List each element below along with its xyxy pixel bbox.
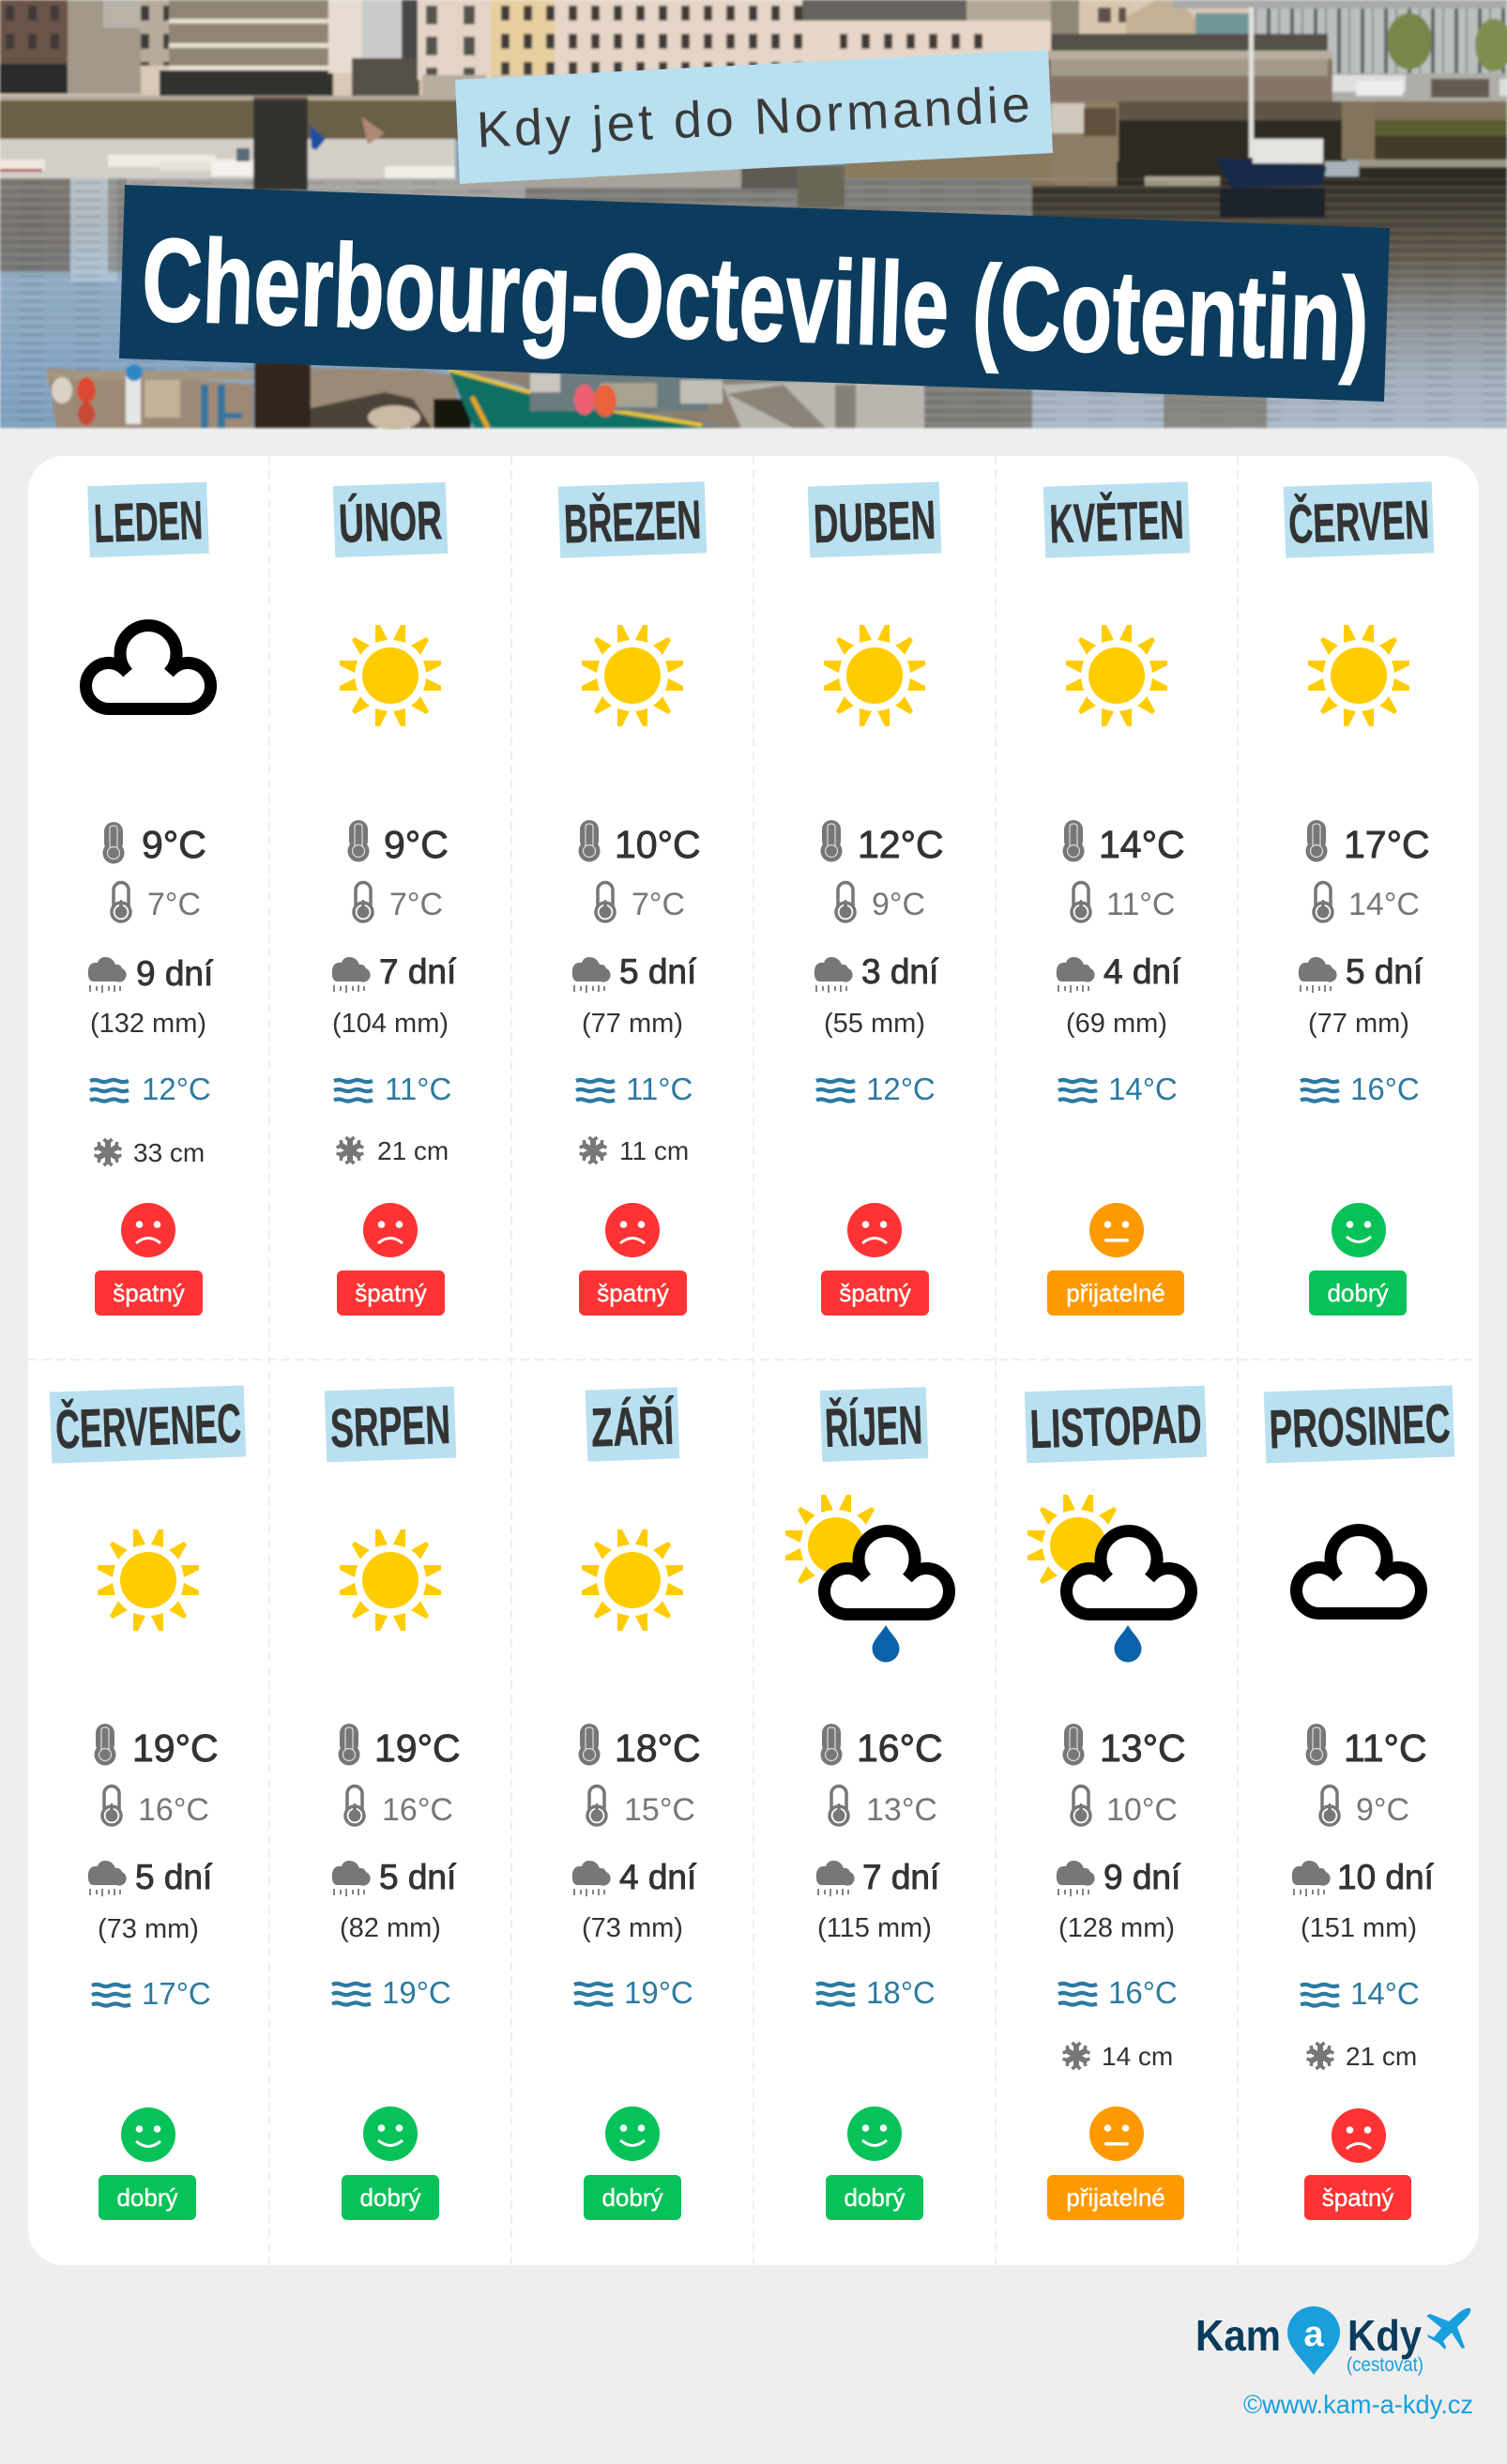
rating badge: špatný bbox=[355, 1279, 427, 1307]
heading: září bbox=[586, 1387, 679, 1462]
rating badge bbox=[337, 1270, 445, 1316]
rain days: 5 dní bbox=[135, 1858, 213, 1896]
max temperature bbox=[94, 1724, 219, 1770]
snow: 21 cm bbox=[377, 1136, 449, 1165]
heading: srpen bbox=[325, 1387, 456, 1462]
min temperature bbox=[1314, 882, 1420, 922]
sea temperature: 16°C bbox=[1108, 1975, 1178, 2010]
month: březen bbox=[558, 481, 707, 1316]
rain days bbox=[332, 1858, 457, 1896]
month: srpen bbox=[325, 1387, 461, 2220]
sea temperature: 17°C bbox=[142, 1976, 211, 2011]
max temperature bbox=[103, 822, 206, 866]
sea temperature: 16°C bbox=[1350, 1072, 1420, 1106]
min temperature: 9°C bbox=[1356, 1792, 1409, 1828]
icon: sun bbox=[582, 1529, 683, 1631]
heading: červen bbox=[1284, 481, 1434, 558]
sea temperature bbox=[334, 1072, 451, 1106]
rating face bbox=[605, 1203, 660, 1257]
icon: sun bbox=[1066, 625, 1167, 726]
month: únor bbox=[332, 482, 457, 1316]
rating badge bbox=[342, 2175, 439, 2220]
icon: sun bbox=[98, 1529, 199, 1631]
rain days: 4 dní bbox=[1104, 952, 1181, 991]
snow bbox=[1307, 2042, 1417, 2071]
rating badge bbox=[826, 2175, 923, 2220]
website url: ©www.kam-a-kdy.cz bbox=[1243, 2390, 1473, 2419]
min temperature bbox=[587, 1787, 695, 1828]
rating face bbox=[605, 2107, 660, 2161]
rainfall: (151 mm) bbox=[1301, 1913, 1417, 1943]
heading: červenec bbox=[50, 1385, 246, 1464]
heading: listopad: LISTOPAD bbox=[1029, 1393, 1203, 1460]
heading: listopad bbox=[1025, 1386, 1207, 1463]
sea temperature bbox=[90, 1072, 211, 1106]
rating badge: dobrý bbox=[116, 2183, 178, 2212]
max temperature: 9°C bbox=[384, 823, 449, 866]
min temperature: 16°C bbox=[138, 1792, 209, 1828]
quay walls bbox=[0, 96, 460, 100]
rainfall: (115 mm) bbox=[817, 1913, 932, 1943]
panel: monthly climate table bbox=[28, 456, 1479, 2265]
min temperature: 7°C bbox=[632, 887, 685, 922]
rain days: 3 dní bbox=[861, 952, 939, 991]
max temperature bbox=[347, 820, 449, 866]
logo tagline: (cestovat) bbox=[1347, 2354, 1423, 2376]
rain days bbox=[1292, 1858, 1435, 1896]
rating badge: špatný bbox=[113, 1279, 185, 1307]
rating face bbox=[121, 2107, 175, 2162]
rating badge bbox=[1047, 1270, 1184, 1316]
sea temperature bbox=[816, 1072, 936, 1106]
sea temperature: 11°C bbox=[626, 1072, 693, 1106]
icon: sun bbox=[1308, 625, 1409, 726]
heading: říjen bbox=[820, 1387, 928, 1462]
min temperature bbox=[1072, 1787, 1178, 1828]
icon: sun, cloud and rain drop bbox=[785, 1495, 950, 1663]
rain days bbox=[814, 952, 939, 993]
min temperature bbox=[596, 882, 685, 922]
rainfall: (77 mm) bbox=[1308, 1009, 1409, 1039]
rating badge bbox=[95, 1270, 203, 1316]
rain days bbox=[88, 954, 214, 993]
max temperature bbox=[1062, 820, 1185, 866]
max temperature: 16°C bbox=[857, 1726, 943, 1770]
sea temperature bbox=[1301, 1072, 1420, 1106]
rain days bbox=[88, 1858, 213, 1896]
min temperature: 10°C bbox=[1106, 1792, 1178, 1828]
max temperature: 19°C bbox=[374, 1726, 461, 1770]
rain days bbox=[572, 1858, 697, 1896]
sea temperature: 12°C bbox=[142, 1072, 211, 1106]
sea temperature: 19°C bbox=[624, 1975, 693, 2010]
moored white boats bbox=[0, 139, 455, 178]
rain days: 9 dní bbox=[136, 954, 214, 993]
min temperature: 14°C bbox=[1348, 887, 1420, 922]
min temperature: 16°C bbox=[382, 1792, 453, 1828]
sea temperature bbox=[1301, 1976, 1420, 2011]
max temperature bbox=[820, 820, 944, 866]
icon: airplane bbox=[1426, 2308, 1470, 2350]
min temperature: 7°C bbox=[389, 887, 443, 922]
icon: cloud bbox=[86, 626, 210, 709]
heading: duben: DUBEN bbox=[813, 490, 936, 555]
icon: sun bbox=[824, 625, 925, 726]
rain days bbox=[816, 1858, 940, 1896]
rating badge: špatný bbox=[1322, 2183, 1393, 2212]
rating badge: dobrý bbox=[359, 2183, 421, 2212]
rain days: 5 dní bbox=[1346, 952, 1423, 991]
month: listopad bbox=[1025, 1386, 1207, 2220]
subtitle banner: Kdy jet do Normandie bbox=[476, 76, 1031, 159]
rain days: 5 dní bbox=[619, 952, 697, 991]
fishing boat bbox=[1216, 158, 1327, 188]
sea temperature bbox=[574, 1975, 693, 2010]
min temperature: 7°C bbox=[147, 887, 201, 922]
snow: 33 cm bbox=[133, 1138, 205, 1167]
rating badge bbox=[579, 1270, 687, 1316]
rainfall: (132 mm) bbox=[90, 1009, 206, 1039]
rating face bbox=[121, 1203, 175, 1257]
icon: sun, cloud and rain drop bbox=[1028, 1495, 1192, 1663]
max temperature: 17°C bbox=[1344, 823, 1430, 866]
rain days bbox=[1299, 952, 1423, 993]
rain days: 10 dní bbox=[1337, 1858, 1435, 1896]
icon: cloud bbox=[1297, 1530, 1421, 1614]
snow bbox=[1063, 2042, 1173, 2071]
rain days bbox=[1057, 952, 1181, 993]
min temperature bbox=[112, 882, 201, 922]
subtitle banner bbox=[455, 50, 1053, 184]
max temperature bbox=[578, 1724, 701, 1770]
max temperature: 11°C bbox=[1344, 1726, 1427, 1770]
month: červen bbox=[1284, 481, 1434, 1316]
rainfall: (128 mm) bbox=[1058, 1913, 1175, 1943]
sea temperature: 18°C bbox=[866, 1975, 936, 2010]
sea temperature: 12°C bbox=[866, 1072, 936, 1106]
min temperature: 15°C bbox=[624, 1792, 695, 1828]
rating badge: dobrý bbox=[844, 2183, 906, 2212]
sea temperature: 14°C bbox=[1350, 1976, 1420, 2011]
max temperature bbox=[820, 1724, 943, 1770]
rating face bbox=[1089, 2107, 1144, 2161]
green hull bbox=[449, 370, 706, 428]
max temperature bbox=[1062, 1724, 1186, 1770]
mooring post bbox=[253, 97, 308, 190]
heading: září: ZÁŘÍ bbox=[590, 1394, 676, 1459]
rating badge: přijatelné bbox=[1066, 2183, 1165, 2212]
month: prosinec bbox=[1264, 1386, 1454, 2220]
heading: únor: ÚNOR bbox=[338, 490, 443, 555]
rainfall: (73 mm) bbox=[582, 1913, 683, 1943]
month: leden bbox=[86, 482, 214, 1316]
month: říjen bbox=[785, 1387, 950, 2220]
rating face bbox=[1332, 1203, 1386, 1257]
rating face bbox=[847, 2107, 902, 2161]
max temperature: 18°C bbox=[615, 1726, 701, 1770]
pavilion bbox=[1051, 34, 1328, 51]
heading: červenec: ČERVENEC bbox=[54, 1393, 242, 1460]
month: duben bbox=[808, 482, 944, 1316]
rating face bbox=[1089, 1203, 1144, 1257]
max temperature: 10°C bbox=[615, 823, 701, 866]
heading: leden: LEDEN bbox=[93, 490, 204, 555]
sea temperature bbox=[1058, 1975, 1178, 2010]
min temperature bbox=[1320, 1787, 1409, 1828]
heading: květen bbox=[1043, 481, 1190, 558]
min temperature: 11°C bbox=[1106, 887, 1175, 922]
rain days: 4 dní bbox=[619, 1858, 697, 1896]
snow bbox=[337, 1136, 449, 1165]
rainfall: (55 mm) bbox=[824, 1009, 925, 1039]
max temperature: 19°C bbox=[132, 1726, 219, 1770]
rainfall: (73 mm) bbox=[98, 1914, 199, 1944]
icon: sun bbox=[340, 1529, 441, 1631]
rain days bbox=[1057, 1858, 1181, 1896]
snow bbox=[580, 1136, 689, 1165]
min temperature bbox=[1072, 882, 1175, 922]
sea temperature: 14°C bbox=[1108, 1072, 1178, 1106]
rain days: 7 dní bbox=[379, 952, 457, 991]
month: květen bbox=[1043, 481, 1190, 1316]
rain days bbox=[332, 952, 457, 993]
min temperature: 9°C bbox=[872, 887, 925, 922]
dock at bottom bbox=[47, 368, 253, 428]
rating badge bbox=[821, 1270, 929, 1316]
rating badge bbox=[99, 2175, 196, 2220]
icon: sun bbox=[340, 625, 441, 726]
max temperature bbox=[1306, 1724, 1427, 1770]
snow bbox=[95, 1138, 205, 1167]
rainfall: (69 mm) bbox=[1066, 1009, 1167, 1039]
heading: říjen: ŘÍJEN bbox=[824, 1394, 923, 1459]
sea temperature bbox=[332, 1975, 451, 2010]
min temperature bbox=[830, 1787, 937, 1828]
rating face bbox=[847, 1203, 902, 1257]
snow: 14 cm bbox=[1102, 2042, 1173, 2071]
max temperature bbox=[338, 1724, 461, 1770]
rainfall: (77 mm) bbox=[582, 1009, 683, 1039]
min temperature: 13°C bbox=[866, 1792, 937, 1828]
sea temperature bbox=[1058, 1072, 1178, 1106]
heading: březen: BŘEZEN bbox=[563, 489, 702, 555]
icon: location pin bbox=[1287, 2306, 1340, 2375]
max temperature: 12°C bbox=[858, 823, 944, 866]
photo: Cherbourg harbour background bbox=[0, 0, 1507, 430]
sea temperature: 19°C bbox=[382, 1975, 451, 2010]
rain days bbox=[572, 952, 697, 993]
snow: 11 cm bbox=[619, 1136, 689, 1165]
sea temperature bbox=[576, 1072, 693, 1106]
rainfall: (104 mm) bbox=[332, 1009, 449, 1039]
max temperature: 14°C bbox=[1099, 823, 1185, 866]
heading: duben bbox=[808, 482, 941, 557]
snow: 21 cm bbox=[1346, 2042, 1417, 2071]
rating face bbox=[1332, 2108, 1386, 2163]
sea temperature: 11°C bbox=[385, 1072, 451, 1106]
logo: Kam a Kdy bbox=[1195, 2306, 1473, 2419]
min temperature bbox=[354, 882, 443, 922]
logo wordmark left: Kam bbox=[1195, 2311, 1281, 2360]
rain days: 9 dní bbox=[1104, 1858, 1181, 1896]
heading: březen bbox=[558, 481, 707, 558]
month: červenec bbox=[50, 1385, 246, 2220]
logo wordmark right: Kdy bbox=[1347, 2311, 1422, 2360]
max temperature bbox=[578, 820, 701, 866]
rain days: 5 dní bbox=[379, 1858, 457, 1896]
min temperature bbox=[345, 1787, 453, 1828]
heading: srpen: SRPEN bbox=[329, 1394, 451, 1459]
sea temperature bbox=[92, 1976, 211, 2011]
rain days: 7 dní bbox=[862, 1858, 940, 1896]
min temperature bbox=[102, 1787, 209, 1828]
heading: leden bbox=[87, 482, 209, 557]
rating face bbox=[363, 1203, 418, 1257]
rating badge: špatný bbox=[839, 1279, 911, 1307]
sea temperature bbox=[816, 1975, 936, 2010]
min temperature bbox=[836, 882, 925, 922]
max temperature: 9°C bbox=[142, 823, 206, 866]
heading: květen: KVĚTEN bbox=[1048, 490, 1185, 555]
rating badge bbox=[1047, 2175, 1184, 2220]
rating badge bbox=[1304, 2175, 1411, 2220]
rating badge: dobrý bbox=[1327, 1279, 1389, 1307]
max temperature: 13°C bbox=[1100, 1726, 1186, 1770]
heading: únor bbox=[333, 482, 448, 557]
buildings bbox=[0, 0, 1507, 103]
rating face bbox=[363, 2107, 418, 2161]
rating badge bbox=[584, 2175, 681, 2220]
rainfall: (82 mm) bbox=[340, 1913, 441, 1943]
rating badge: špatný bbox=[597, 1279, 669, 1307]
rating badge bbox=[1309, 1270, 1407, 1316]
rating badge: přijatelné bbox=[1066, 1279, 1165, 1307]
icon: location pin: a bbox=[1303, 2315, 1324, 2354]
month: září bbox=[572, 1387, 701, 2220]
icon: sun bbox=[582, 625, 683, 726]
water bbox=[0, 178, 525, 428]
max temperature bbox=[1306, 820, 1430, 866]
rating badge: dobrý bbox=[601, 2183, 663, 2212]
